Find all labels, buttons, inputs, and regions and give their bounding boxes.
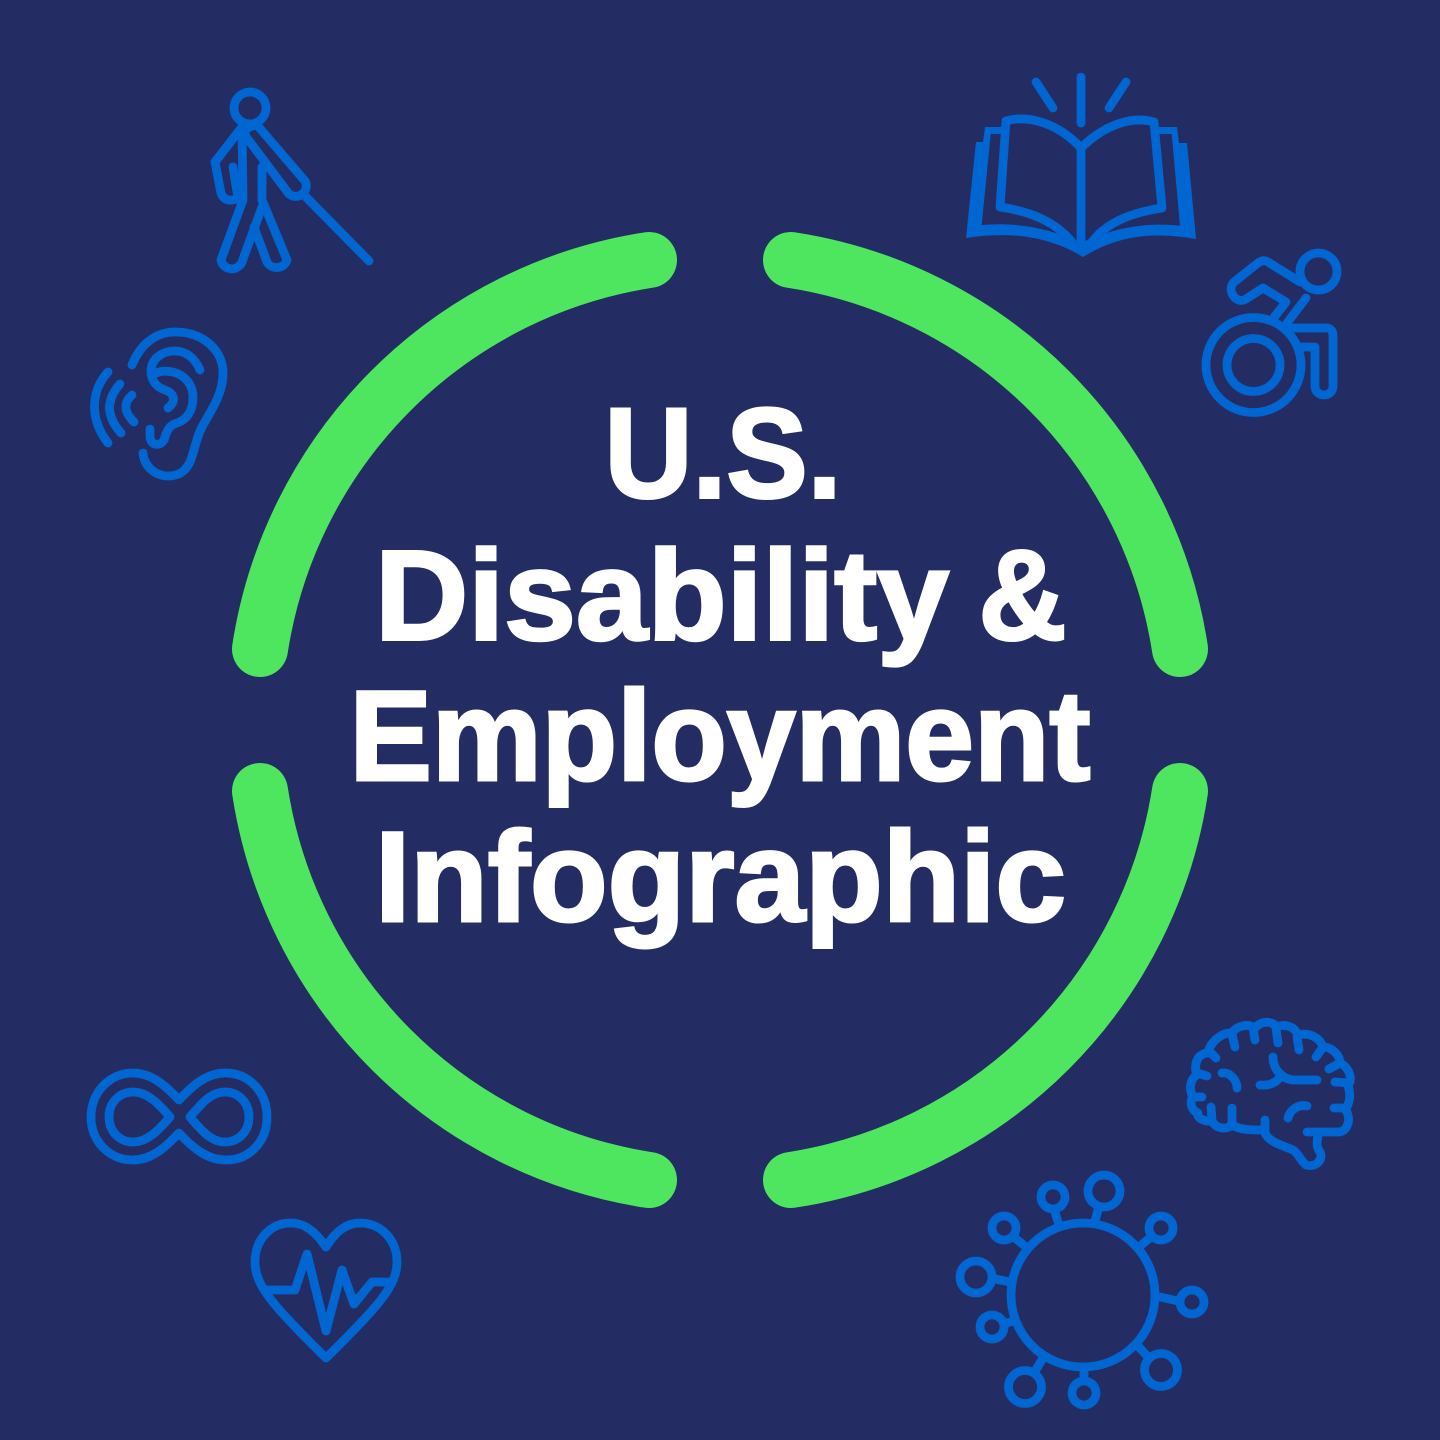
title line 2: & [978,524,1066,668]
ring arc: top left [260,260,649,649]
icon: heart with pulse line [255,1223,397,1358]
icon: open book with rays [966,77,1196,257]
icon: brain [1190,1022,1350,1166]
green segmented ring [260,260,1180,1180]
ring arc: bottom left [260,791,649,1180]
title line 1: U.S. [604,382,842,526]
icon: person walking with white cane [215,92,369,269]
icon: ear with sound waves [94,332,223,476]
icon: infinity symbol [91,1073,267,1160]
book pages [1000,77,1162,250]
ring arc: bottom right [791,791,1180,1180]
book cover [966,127,1196,257]
title line 3: Employment [350,665,1090,808]
title line 4: Infographic [375,806,1066,949]
icon: virus [960,1175,1204,1405]
title line 2: Disability [375,524,949,668]
title [350,382,1090,949]
ring arc: top right [791,260,1180,649]
icon: wheelchair user [1206,253,1337,412]
